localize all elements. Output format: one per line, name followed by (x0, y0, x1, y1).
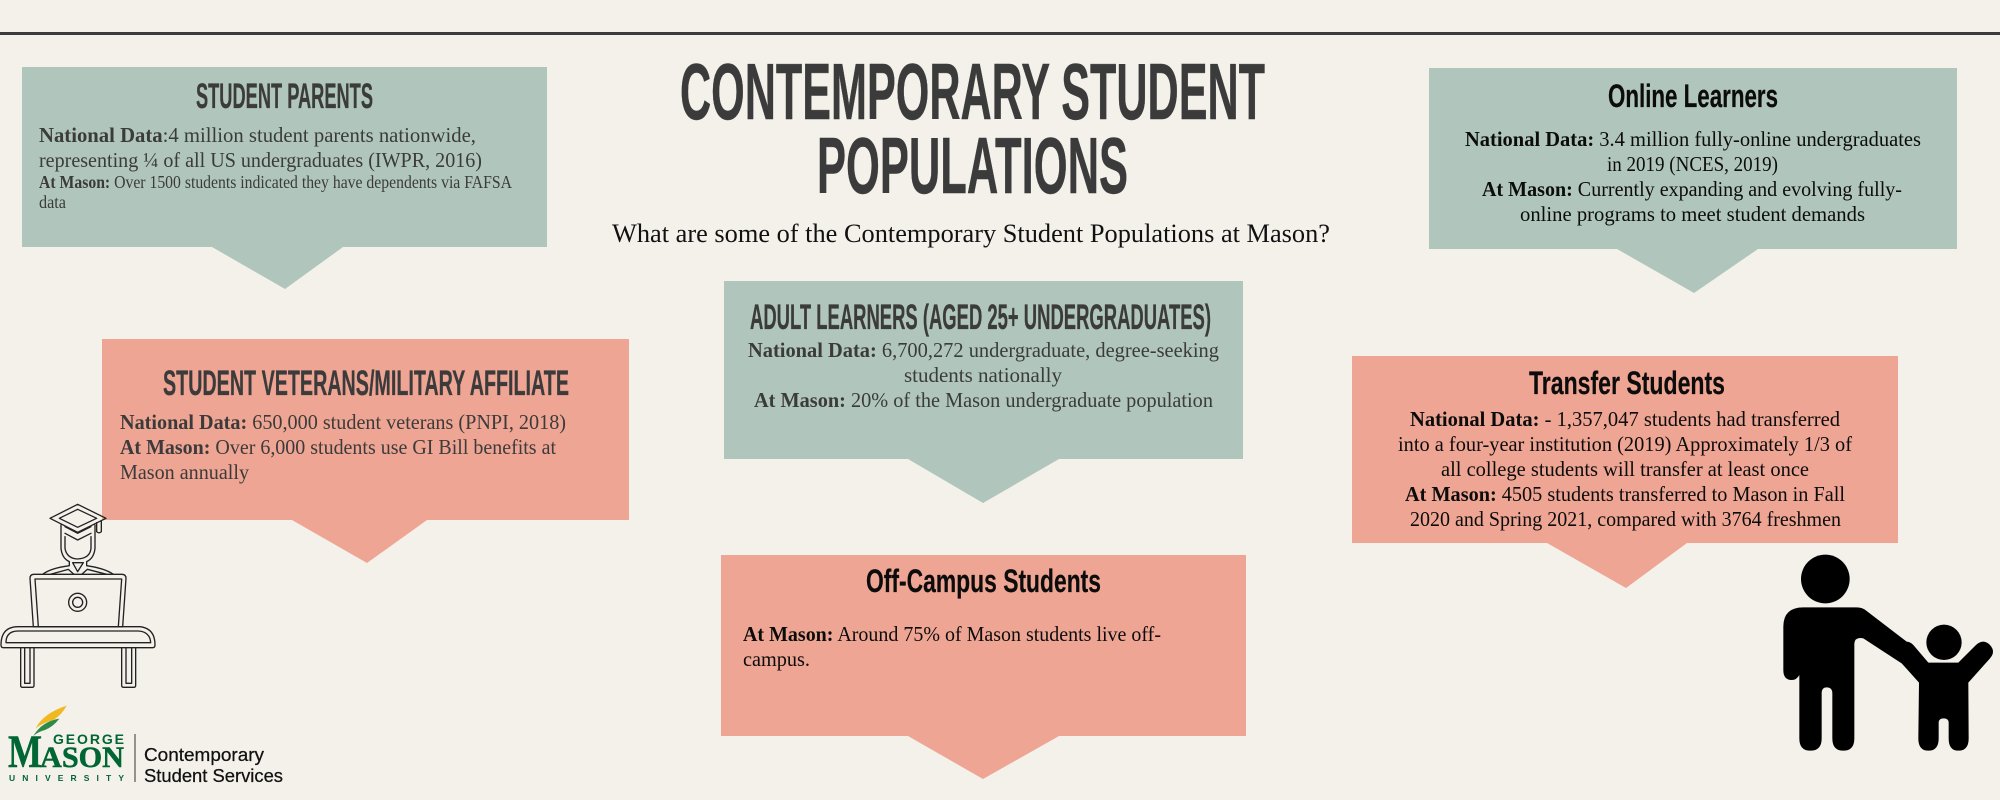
panel: student parents: representing ¼ of all US undergraduates (IWPR, 2016) (39, 148, 482, 172)
panel: student parents (22, 67, 547, 289)
panel: adult learners: National Data: 6,700,272 undergraduate, degree-seeking (748, 338, 1219, 362)
logo: George Mason University: Contemporary (144, 745, 264, 765)
panel: adult learners: At Mason: 20% of the Mason undergraduate population (754, 388, 1213, 412)
panel: student veterans: At Mason: Over 6,000 students use GI Bill benefits at (120, 435, 556, 459)
panel: adult learners: ADULT LEARNERS (AGED 25+ UNDERGRADUATES) (750, 298, 1211, 337)
panel: online learners: National Data: 3.4 million fully-online undergraduates (1465, 127, 1921, 151)
panel: online learners (1429, 68, 1957, 293)
panel: transfer students: into a four-year institution (2019) Approximately 1/3 of (1398, 432, 1853, 456)
icon: graduate at laptop (1, 504, 155, 687)
panel: off-campus students: At Mason: Around 75% of Mason students live off- (743, 622, 1161, 646)
panel: online learners: online programs to meet student demands (1520, 202, 1865, 226)
logo: George Mason University: M (8, 726, 42, 778)
panel: student parents: data (39, 192, 66, 212)
title (680, 47, 1265, 210)
icon: logo leaf (33, 706, 67, 736)
icon: parent and child (1783, 555, 1993, 751)
logo: George Mason University: UNIVERSITY (9, 773, 124, 783)
logo: George Mason University (8, 706, 283, 786)
logo: George Mason University: GEORGE (53, 731, 124, 747)
panel: online learners: At Mason: Currently expanding and evolving fully- (1482, 177, 1902, 201)
panel: student veterans (102, 339, 629, 563)
panel: online learners: Online Learners (1608, 78, 1778, 114)
panel: student veterans: STUDENT VETERANS/MILITARY AFFILIATE (163, 364, 569, 403)
panel: transfer students: At Mason: 4505 students transferred to Mason in Fall (1405, 482, 1845, 506)
panel: off-campus students: campus. (743, 647, 810, 671)
panel: transfer students: all college students will transfer at least once (1441, 457, 1809, 481)
panel: student parents: STUDENT PARENTS (196, 77, 373, 116)
logo: George Mason University: Student Services (144, 766, 283, 786)
panel: student parents: At Mason: Over 1500 students indicated they have dependents via FAFSA (39, 172, 512, 192)
panel: off-campus students (721, 555, 1246, 779)
panel: student veterans: National Data: 650,000 student veterans (PNPI, 2018) (120, 410, 566, 434)
panel: student veterans: Mason annually (120, 460, 249, 484)
title: CONTEMPORARY STUDENT (680, 47, 1265, 136)
title: POPULATIONS (817, 121, 1128, 210)
panel: transfer students: Transfer Students (1529, 365, 1725, 401)
panel: transfer students: National Data: - 1,357,047 students had transferred (1410, 407, 1840, 431)
subtitle: What are some of the Contemporary Student Populations at Mason? (612, 219, 1330, 248)
panel: adult learners: students nationally (904, 363, 1062, 387)
panel: transfer students: 2020 and Spring 2021, compared with 3764 freshmen (1410, 507, 1841, 531)
panel: adult learners (724, 281, 1243, 503)
panel: transfer students (1352, 356, 1898, 588)
panel: student parents: National Data:4 million student parents nationwide, (39, 123, 476, 147)
logo: George Mason University: ASON (40, 741, 124, 774)
panel: online learners: in 2019 (NCES, 2019) (1607, 152, 1778, 176)
panel: off-campus students: Off-Campus Students (866, 563, 1101, 599)
